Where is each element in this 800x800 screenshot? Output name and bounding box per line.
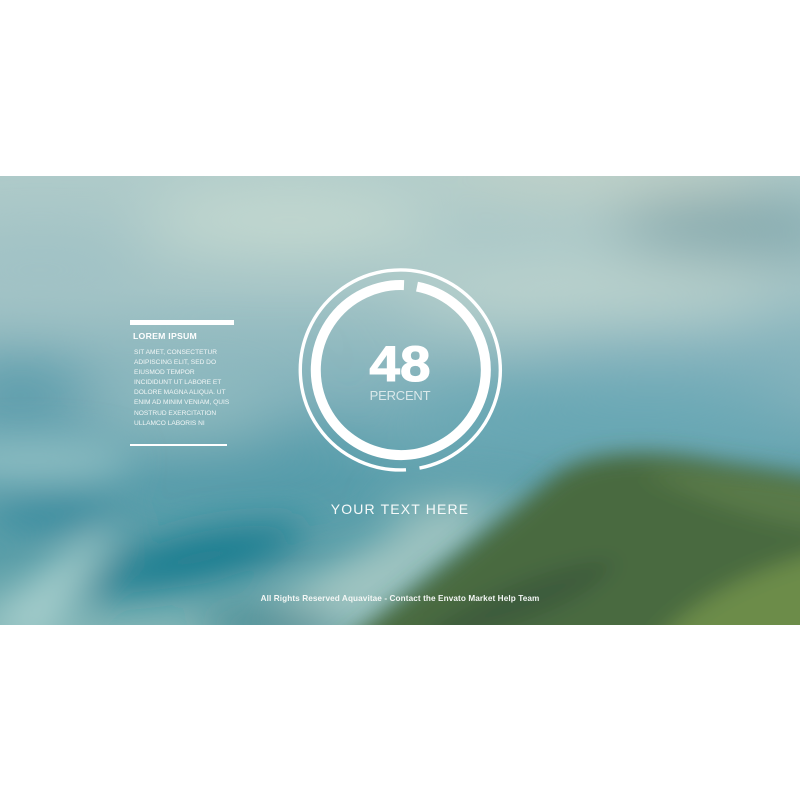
panel body text: ULLAMCO LABORIS NI [134, 420, 205, 427]
footer credit: All Rights Reserved Aquavitae - Contact the Envato Market Help Team [261, 594, 539, 603]
panel body text: ADIPISCING ELIT, SED DO [134, 359, 216, 366]
panel: lorem ipsum text block [130, 320, 234, 446]
inner ring [316, 285, 486, 455]
panel bottom rule [130, 444, 227, 446]
panel body text [134, 349, 229, 427]
panel body text: EIUSMOD TEMPOR [134, 369, 195, 376]
panel body text: ENIM AD MINIM VENIAM, QUIS [134, 399, 229, 406]
panel body text: INCIDIDUNT UT LABORE ET [134, 379, 221, 386]
blurred coastal photo background [0, 176, 800, 625]
label: percent: PERCENT [370, 388, 430, 403]
outer ring [300, 270, 500, 470]
panel body text: NOSTRUD EXERCITATION [134, 410, 216, 417]
panel heading: LOREM IPSUM [133, 331, 197, 341]
panel body text: SIT AMET, CONSECTETUR [134, 349, 217, 356]
donut gauge [298, 268, 502, 472]
panel top bar [130, 320, 234, 325]
value: 48: 48 [369, 336, 431, 392]
caption: your text here: YOUR TEXT HERE [331, 501, 469, 517]
panel body text: DOLORE MAGNA ALIQUA. UT [134, 389, 226, 396]
